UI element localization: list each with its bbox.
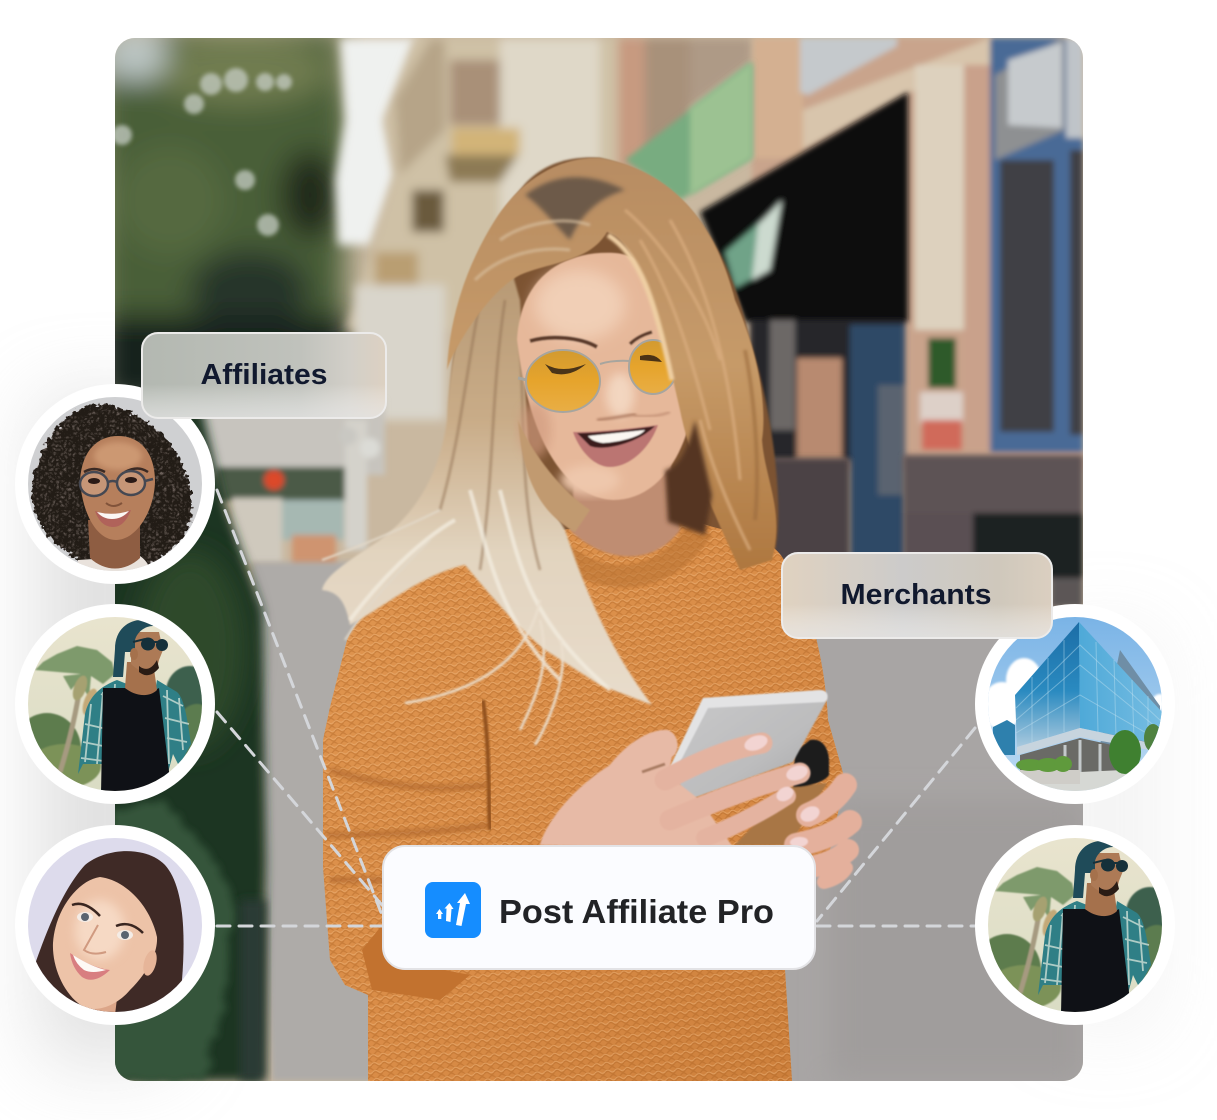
central building [345, 38, 752, 420]
ribbed cuff [362, 925, 470, 1000]
neck [570, 460, 680, 556]
front hair top and lock [447, 158, 776, 570]
coffee cup [735, 740, 829, 845]
sidewalk [252, 559, 368, 1081]
affiliate portrait: man in plaid shirt [13, 604, 219, 804]
merchant portrait: man in plaid shirt [973, 825, 1179, 1025]
affiliate portrait: curly-haired woman [15, 384, 215, 584]
panel: street photo [100, 29, 1083, 1081]
nose [597, 414, 636, 420]
long hair left [322, 230, 652, 705]
trees top-left [100, 29, 350, 405]
affiliate portrait: smiling brunette woman [15, 825, 215, 1025]
hands [540, 730, 850, 882]
dark under-hair [665, 420, 712, 535]
sleeve crease [483, 700, 490, 830]
left shop [200, 411, 387, 564]
photo background: blurred street [100, 29, 1083, 1081]
back hair [450, 156, 780, 550]
icon: rising arrows logo [425, 882, 481, 938]
green shop sign [625, 62, 752, 200]
sky gap [335, 38, 418, 245]
right building [752, 38, 1083, 470]
mouth [573, 425, 658, 467]
woman [322, 158, 850, 1081]
smartphone [670, 690, 828, 800]
glasses [518, 340, 677, 412]
bokeh [112, 68, 292, 236]
dark brick storefront [757, 455, 1083, 608]
dashed connector lines [217, 490, 975, 926]
label: Merchants: Merchants [840, 579, 992, 611]
label: Merchants [782, 553, 1052, 638]
hand holding the cup [790, 785, 850, 882]
card: Post Affiliate Pro [383, 846, 815, 969]
hand holding the phone [540, 730, 810, 850]
soft shadow behind portraits [40, 400, 1160, 1060]
black awning [700, 92, 908, 560]
hedge [105, 400, 266, 1081]
face [517, 253, 693, 500]
merchant portrait: glass office building [975, 604, 1175, 804]
golden strands under the face [518, 420, 590, 532]
pavement [780, 625, 1083, 1081]
label: Affiliates: Affiliates [200, 359, 328, 391]
label: Affiliates [142, 333, 386, 418]
sweater [323, 518, 845, 1081]
wordmark: Post Affiliate Pro [499, 893, 774, 930]
eyebrows [530, 338, 597, 347]
